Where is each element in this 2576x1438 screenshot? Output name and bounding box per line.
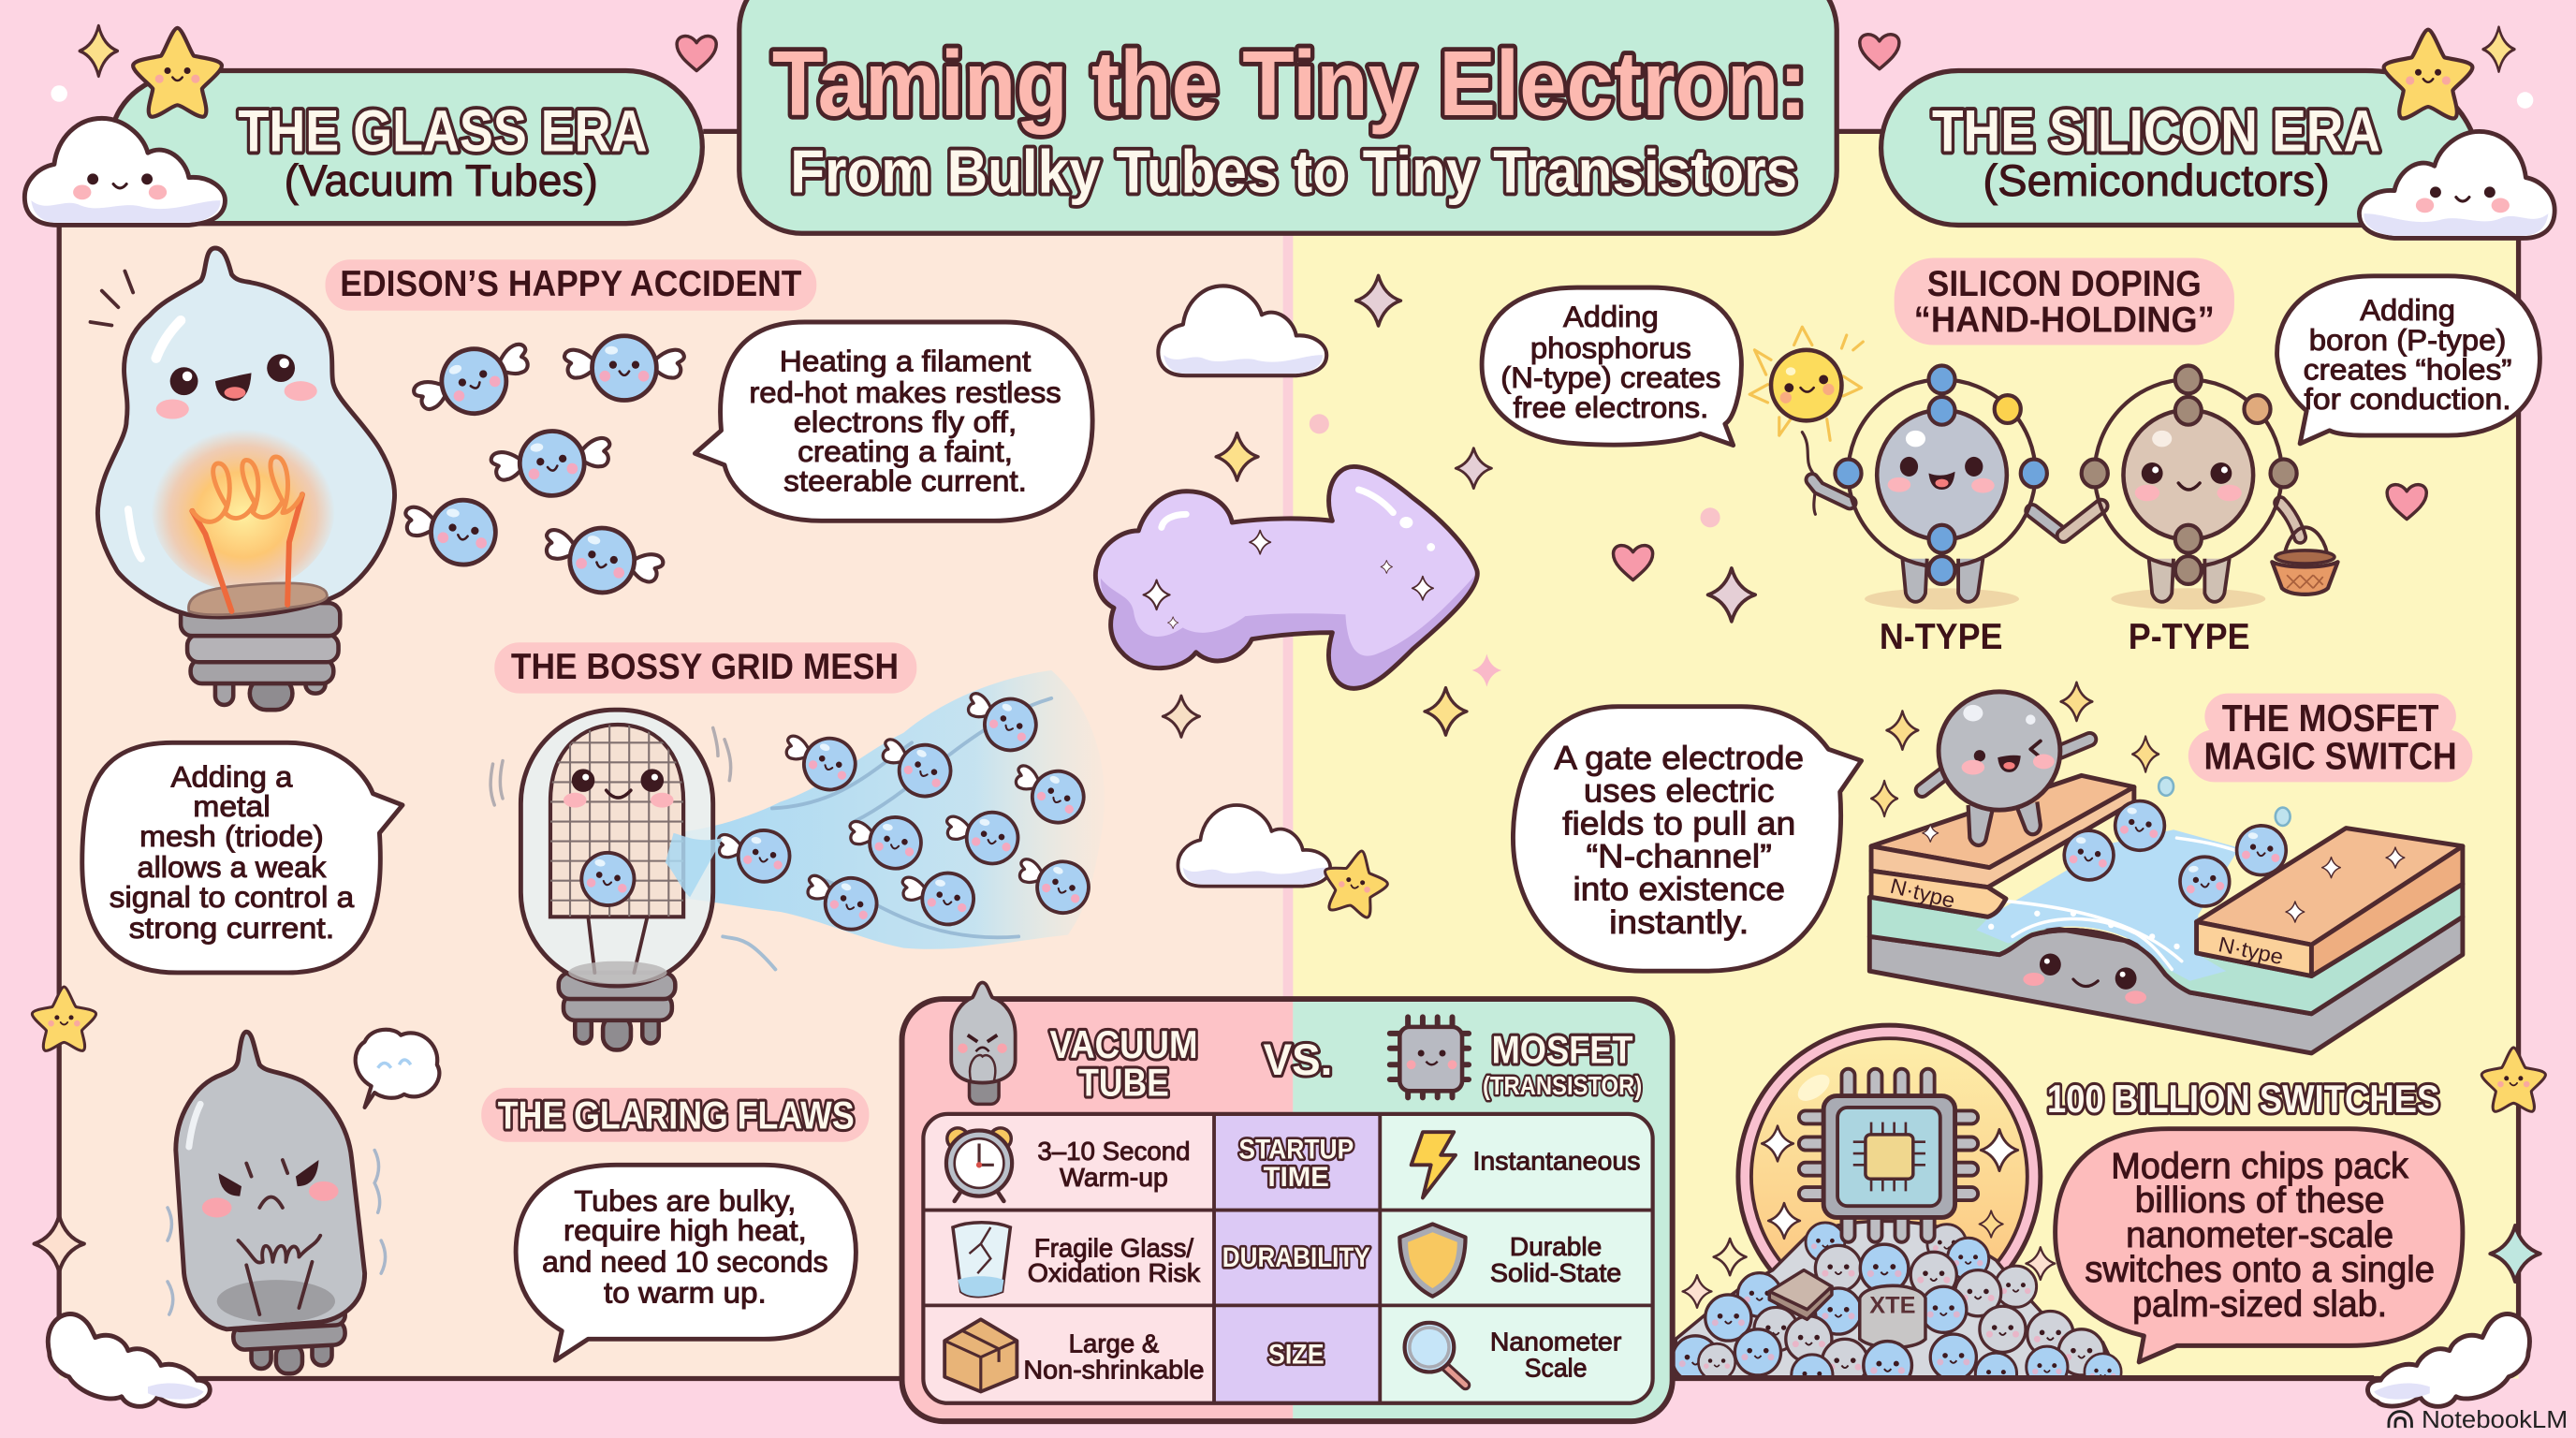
dot xyxy=(1701,507,1720,527)
speech bubble: triode: metal xyxy=(193,789,271,823)
row: size xyxy=(944,1319,1621,1392)
frame bottom edge over pile xyxy=(1676,1376,2374,1379)
row: startup xyxy=(946,1128,1640,1201)
dot xyxy=(51,85,67,102)
cloud: top left xyxy=(24,118,225,225)
callout: modern chips: palm-sized slab. xyxy=(2132,1284,2387,1325)
speech bubble: phosphorus: (N-type) creates xyxy=(1500,360,1720,394)
heart xyxy=(1860,35,1899,69)
row: durability: Oxidation Risk xyxy=(1028,1258,1201,1287)
heading: MOSFET: THE MOSFET xyxy=(2222,697,2439,740)
speech bubble: phosphorus: free electrons. xyxy=(1513,390,1708,424)
thought puff xyxy=(356,1030,439,1108)
illustration: MOSFET slab xyxy=(1869,775,2463,1053)
table grid xyxy=(923,1114,1653,1403)
callout: modern chips: switches onto a single xyxy=(2085,1250,2435,1290)
header pill: glass era: (Vacuum Tubes) xyxy=(285,156,598,206)
illustration: gate character xyxy=(1922,692,2089,845)
sparkle xyxy=(2026,1247,2055,1280)
comparison table xyxy=(902,983,1673,1421)
callout: modern chips: nanometer-scale xyxy=(2126,1215,2393,1255)
cloud: mid top xyxy=(1158,286,1326,375)
heading: silicon doping: SILICON DOPING xyxy=(1927,264,2202,304)
row: durability: Solid-State xyxy=(1490,1258,1621,1287)
cloud: bottom left xyxy=(48,1314,210,1406)
centre divider strip xyxy=(1283,130,1293,1378)
speech bubble: flaws: require high heat, xyxy=(564,1213,807,1247)
sparkle xyxy=(1980,1211,2003,1238)
star: top left xyxy=(133,28,222,117)
speech bubble: triode: strong current. xyxy=(129,911,334,945)
speech bubble: triode: mesh (triode) xyxy=(139,819,324,853)
star: top right xyxy=(2384,30,2472,119)
icon: sun on wand xyxy=(1749,327,1863,514)
speech bubble: gate: “N-channel” xyxy=(1587,839,1772,875)
label: N-type right: N·type xyxy=(2217,932,2286,969)
speech bubble: filament xyxy=(695,322,1092,521)
star: mid xyxy=(1317,844,1393,920)
heading: Edison: EDISON’S HAPPY ACCIDENT xyxy=(340,264,802,304)
icon: basket xyxy=(2272,527,2338,594)
sparkle xyxy=(1472,654,1501,687)
speech bubble: filament: red-hot makes restless xyxy=(749,375,1061,409)
sparkle xyxy=(1714,1239,1747,1275)
sparkle xyxy=(1425,688,1467,735)
sparkle xyxy=(1356,275,1400,326)
cloud: bottom right xyxy=(2368,1314,2529,1406)
illustration: happy bulb xyxy=(91,248,395,710)
label: N-type left: N·type xyxy=(1888,873,1957,913)
speech bubble: phosphorus: Adding xyxy=(1563,300,1659,333)
header: vs: VS. xyxy=(1264,1035,1332,1085)
speech bubble: gate: instantly. xyxy=(1609,904,1749,941)
icon: mini chip xyxy=(1390,1017,1469,1097)
sparkle xyxy=(1456,448,1491,489)
heading: silicon doping: “HAND-HOLDING” xyxy=(1914,301,2215,341)
speech bubble: gate: into existence xyxy=(1573,872,1785,908)
icon: cardboard box xyxy=(944,1319,1017,1392)
speech bubble: gate: uses electric xyxy=(1584,772,1775,809)
sparkle xyxy=(2061,682,2092,721)
illustration: chip xyxy=(1799,1069,1978,1242)
sparkle xyxy=(1683,1275,1711,1308)
label: P-type: P-TYPE xyxy=(2129,617,2250,657)
heading: 100 billion: 100 BILLION SWITCHES xyxy=(2047,1077,2439,1121)
sparkle: right border xyxy=(2490,1225,2540,1282)
illustration: mesh tube xyxy=(490,710,731,1049)
speech bubble: phosphorus xyxy=(1482,287,1741,446)
subtitle: From Bulky Tubes to Tiny Transistors xyxy=(790,137,1797,205)
panel: silicon era background xyxy=(1293,130,2519,1378)
icon: mini tube xyxy=(951,983,1016,1104)
row: size: Large & xyxy=(1069,1328,1159,1357)
speech bubble: boron: Adding xyxy=(2360,293,2455,327)
row: startup: STARTUP xyxy=(1238,1134,1354,1165)
row: startup: Instantaneous xyxy=(1472,1147,1640,1176)
heart xyxy=(677,37,716,70)
star: right border xyxy=(2481,1048,2545,1111)
heading: MOSFET xyxy=(2188,694,2472,782)
header: transistor: (TRANSISTOR) xyxy=(1483,1071,1642,1100)
row: durability: DURABILITY xyxy=(1222,1242,1370,1273)
speech bubble: filament: creating a faint, xyxy=(798,434,1013,468)
dot xyxy=(1310,414,1329,433)
heading: MOSFET: MAGIC SWITCH xyxy=(2203,734,2457,777)
speech bubble: triode: allows a weak xyxy=(138,850,327,884)
header: mosfet: MOSFET xyxy=(1492,1028,1633,1072)
speech bubble: gate: fields to pull an xyxy=(1562,806,1795,843)
sparkle xyxy=(80,26,118,76)
heart xyxy=(1614,546,1653,580)
speech bubble: boron: boron (P-type) xyxy=(2309,323,2506,357)
header pill: silicon era xyxy=(1881,70,2481,225)
speech bubble: flaws: to warm up. xyxy=(604,1276,767,1310)
sparkle: left border xyxy=(35,1216,84,1272)
speech bubble: phosphorus: phosphorus xyxy=(1530,331,1691,365)
callout: modern chips: Modern chips pack xyxy=(2111,1146,2409,1186)
icon: magnifier xyxy=(1405,1323,1466,1385)
panel: glass era background xyxy=(59,130,1283,1378)
speech bubble: triode xyxy=(82,742,402,973)
heading: Bossy grid: THE BOSSY GRID MESH xyxy=(511,647,899,687)
illustration: coin behind chip xyxy=(1738,1025,2041,1328)
callout: modern chips: billions of these xyxy=(2135,1181,2385,1221)
row: durability xyxy=(953,1223,1621,1297)
row: size: Nanometer xyxy=(1490,1328,1621,1357)
illustration: P-type atom xyxy=(2063,365,2300,609)
callout: modern chips xyxy=(2056,1129,2463,1362)
cloud: mid lower xyxy=(1178,805,1330,887)
sparkle xyxy=(2483,27,2514,71)
speech bubble: flaws: and need 10 seconds xyxy=(542,1244,828,1278)
dot xyxy=(2517,92,2533,109)
header pill: glass era xyxy=(110,70,702,224)
sparkle xyxy=(1216,433,1258,480)
header: vacuum tube: VACUUM xyxy=(1050,1022,1197,1066)
sparkle xyxy=(1871,781,1897,816)
heart xyxy=(2387,485,2426,520)
icon: alarm clock xyxy=(946,1128,1012,1201)
sparkle xyxy=(2132,737,2159,772)
icon: lightning bolt xyxy=(1412,1132,1456,1197)
row: startup: Warm-up xyxy=(1060,1163,1168,1192)
header: tube word: TUBE xyxy=(1078,1061,1169,1105)
header pill: glass era: THE GLASS ERA xyxy=(238,98,648,164)
speech bubble: triode: signal to control a xyxy=(110,880,355,914)
row: startup: 3–10 Second xyxy=(1037,1137,1191,1166)
header pill: silicon era: THE SILICON ERA xyxy=(1932,98,2380,164)
sparkle xyxy=(1708,568,1755,622)
row: size: Scale xyxy=(1525,1354,1587,1383)
row: size: SIZE xyxy=(1268,1340,1325,1371)
illustration: grumpy tube xyxy=(168,1032,386,1373)
speech bubble: gate xyxy=(1513,707,1862,971)
speech bubble: boron: for conduction. xyxy=(2305,382,2511,416)
icon: cracked glass xyxy=(953,1223,1010,1297)
speech bubble: filament: steerable current. xyxy=(783,464,1027,498)
speech bubble: flaws xyxy=(516,1165,856,1360)
row: durability: Fragile Glass/ xyxy=(1034,1234,1193,1263)
speech bubble: flaws: Tubes are bulky, xyxy=(574,1183,796,1217)
pile label: XTE xyxy=(1869,1293,1915,1318)
icon: shield xyxy=(1399,1224,1466,1297)
row: startup: TIME xyxy=(1264,1162,1329,1193)
row: durability: Durable xyxy=(1510,1232,1602,1261)
star: left border xyxy=(32,987,96,1050)
row: size: Non-shrinkable xyxy=(1023,1355,1204,1384)
header pill: silicon era: (Semiconductors) xyxy=(1983,156,2330,206)
pile of old electrons and chips xyxy=(1676,1219,2123,1376)
watermark: NotebookLM: NotebookLM xyxy=(2422,1405,2568,1433)
title banner xyxy=(739,0,1837,233)
speech bubble: boron xyxy=(2277,276,2539,444)
sparkle xyxy=(1887,712,1918,750)
speech bubble: triode: Adding a xyxy=(171,760,293,794)
title: Taming the Tiny Electron: xyxy=(772,32,1808,135)
speech bubble: filament: electrons fly off, xyxy=(794,405,1017,439)
purple transition arrow xyxy=(1095,466,1477,688)
electrons flying off xyxy=(400,329,684,606)
heading: Glaring flaws: THE GLARING FLAWS xyxy=(498,1093,855,1137)
speech bubble: gate: A gate electrode xyxy=(1554,740,1804,776)
heading: silicon doping xyxy=(1895,258,2234,345)
cloud: top right xyxy=(2359,131,2554,238)
speech bubble: filament: Heating a filament xyxy=(780,345,1032,378)
speech bubble: boron: creates “holes” xyxy=(2304,352,2512,386)
flow of electrons through mesh xyxy=(674,670,1105,969)
label: N-type: N-TYPE xyxy=(1880,617,2002,657)
illustration: N-type atom xyxy=(1812,365,2062,609)
sparkle xyxy=(1163,696,1200,737)
